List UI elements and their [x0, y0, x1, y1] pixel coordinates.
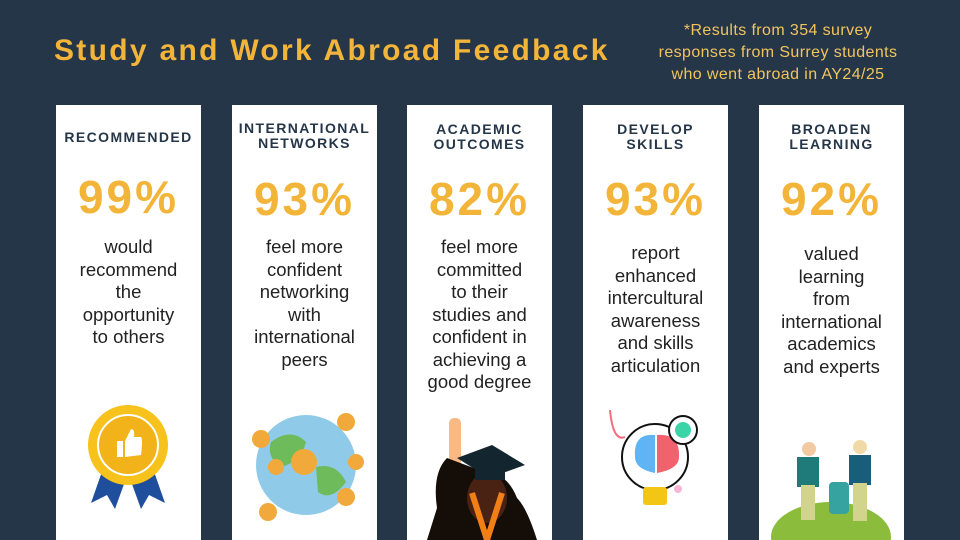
heading: BROADEN	[791, 121, 872, 137]
heading	[617, 121, 694, 152]
heading: DEVELOP	[617, 121, 694, 137]
heading: INTERNATIONAL	[239, 120, 370, 136]
icon: award ribbon	[88, 405, 168, 509]
body: committed	[437, 258, 522, 280]
title: Study and Work Abroad Feedback	[54, 34, 610, 67]
body	[781, 243, 882, 377]
icon: graduate	[427, 418, 537, 540]
note: responses from Surrey students	[659, 44, 897, 61]
body: to their	[451, 281, 508, 302]
body: awareness	[611, 310, 700, 330]
heading: LEARNING	[789, 136, 874, 152]
heading: ACADEMIC	[436, 121, 523, 137]
heading: SKILLS	[626, 136, 685, 152]
icon: lightbulb brain	[609, 410, 698, 505]
body: confident in	[432, 326, 527, 347]
icon: globe network	[252, 413, 364, 521]
body: report	[631, 242, 680, 263]
body	[428, 236, 531, 392]
body: learning	[799, 266, 864, 286]
body: and skills	[617, 332, 694, 353]
panel: develop skills	[583, 105, 728, 540]
note: who went abroad in AY24/25	[672, 66, 884, 83]
heading	[239, 120, 370, 151]
body: achieving a	[433, 348, 526, 370]
body: the	[116, 281, 141, 302]
percent: 92%	[781, 173, 882, 225]
body: to others	[92, 326, 164, 347]
body: feel more	[266, 236, 343, 257]
body: good degree	[428, 371, 531, 392]
heading	[433, 121, 526, 152]
body: valued	[804, 243, 859, 264]
body: and experts	[783, 356, 880, 376]
body: peers	[281, 348, 328, 370]
icon: travellers on globe	[771, 440, 891, 540]
body: would	[104, 236, 153, 257]
heading	[789, 121, 874, 152]
percent: 82%	[429, 173, 530, 225]
body: international	[781, 310, 882, 332]
body: enhanced	[615, 264, 696, 286]
body: recommend	[80, 258, 177, 280]
body: articulation	[611, 354, 700, 376]
body: studies and	[432, 304, 527, 324]
body: intercultural	[608, 287, 703, 308]
body: feel more	[441, 236, 518, 257]
body: academics	[787, 333, 876, 354]
body	[608, 242, 703, 376]
note: *Results from 354 survey	[684, 22, 872, 39]
body: with	[288, 304, 321, 324]
body: opportunity	[83, 304, 174, 324]
percent: 93%	[254, 173, 355, 225]
heading: RECOMMENDED	[64, 129, 193, 145]
panel: recommended	[56, 105, 201, 540]
panel: broaden learning	[759, 105, 904, 540]
percent: 99%	[78, 171, 179, 223]
body: networking	[260, 281, 349, 302]
heading: OUTCOMES	[433, 136, 526, 152]
panel: academic outcomes	[407, 105, 552, 540]
body: confident	[267, 258, 342, 280]
body: international	[254, 326, 355, 347]
heading: NETWORKS	[258, 135, 351, 151]
panel: international networks	[232, 105, 377, 540]
body	[254, 236, 355, 370]
body	[80, 236, 177, 347]
body: from	[813, 288, 850, 309]
percent: 93%	[605, 173, 706, 225]
note	[659, 22, 897, 83]
